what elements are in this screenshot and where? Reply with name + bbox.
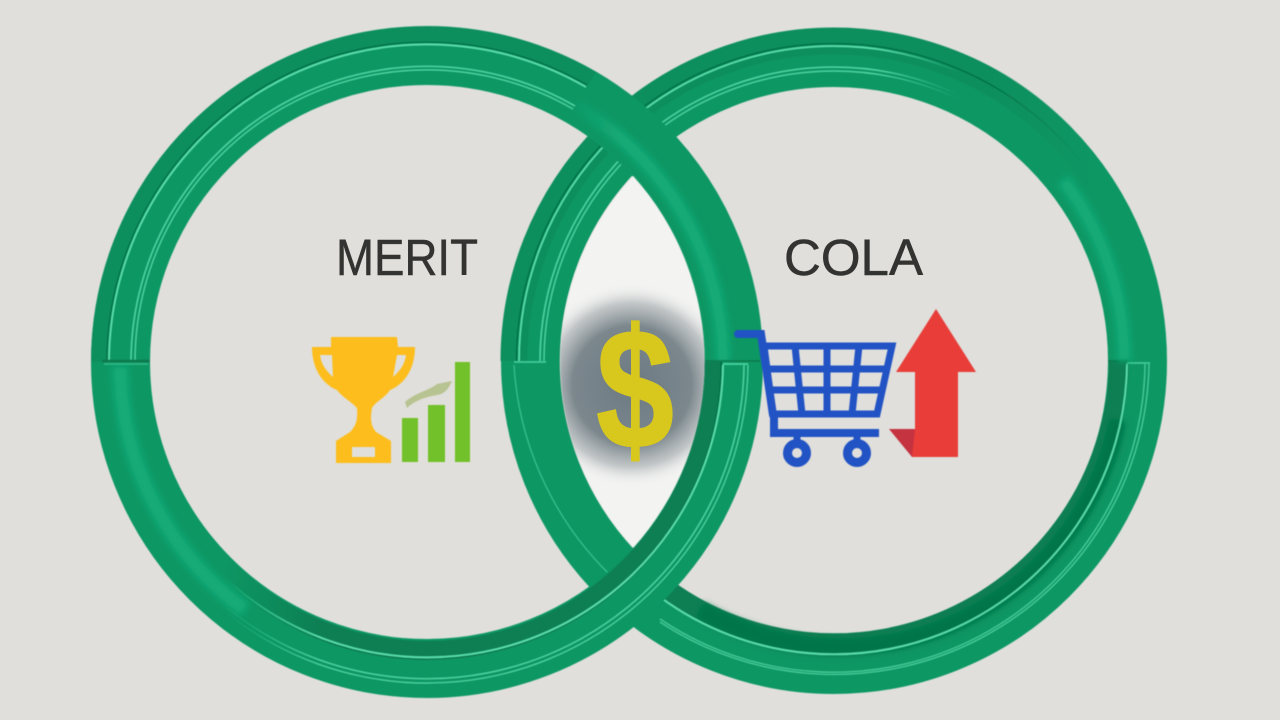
- bar 3: [455, 362, 470, 462]
- label: MERIT: MERIT: [336, 229, 478, 286]
- trend arrow: [405, 381, 452, 408]
- ring: COLA circle: [514, 41, 1154, 674]
- ring: MERIT circle: [91, 26, 760, 683]
- icon: red up arrow: [889, 309, 976, 457]
- venn diagram infographic: [90, 25, 1168, 699]
- overlap lens: [560, 176, 705, 548]
- icon: shopping cart: [738, 334, 892, 462]
- bar 1: [402, 418, 418, 462]
- label: COLA: COLA: [784, 229, 923, 286]
- icon: dollar sign: $: [596, 294, 674, 485]
- shaded halo behind dollar: [560, 176, 705, 548]
- bar 2: [428, 405, 445, 462]
- icon: trophy: [312, 337, 415, 463]
- icon: rising bar chart: [402, 362, 470, 462]
